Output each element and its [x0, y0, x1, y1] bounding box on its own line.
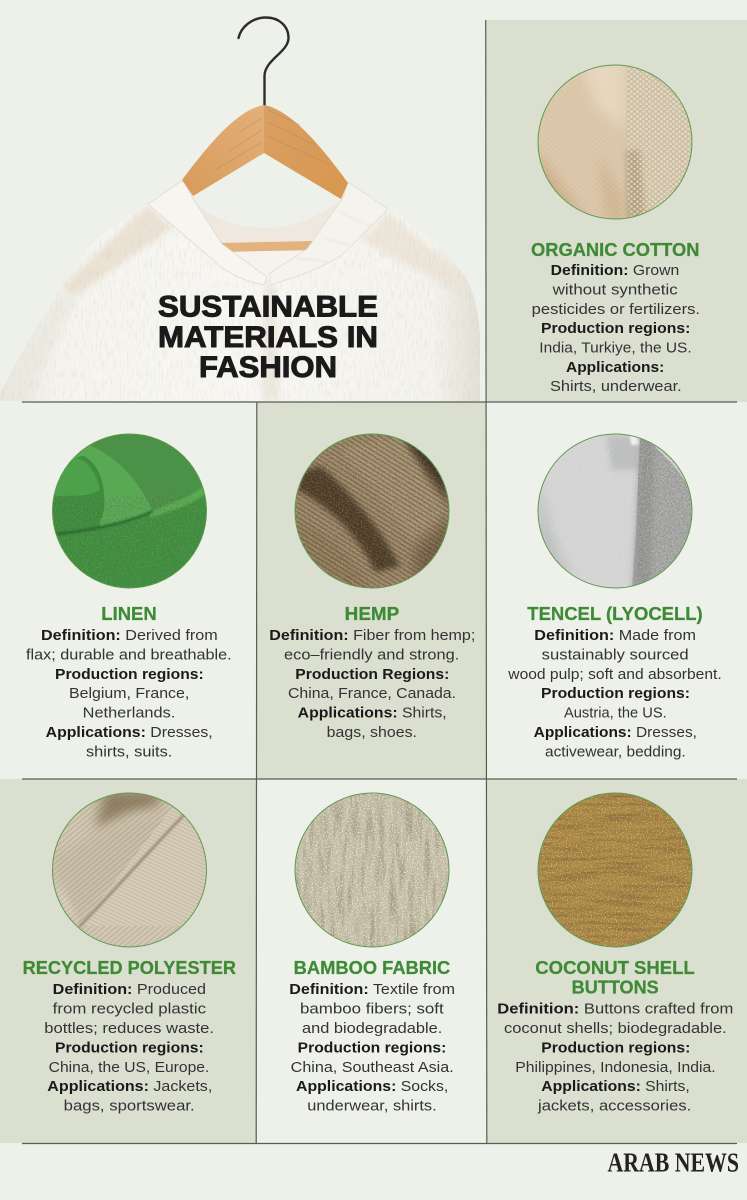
heading: BAMBOO FABRIC — [294, 958, 450, 978]
text block: bags, sportswear. — [64, 1098, 195, 1114]
panel: tencel lyocell — [507, 430, 722, 760]
text block — [497, 1002, 733, 1114]
text block: Definition: Derived from — [41, 628, 218, 644]
text block: Applications: Shirts, — [541, 1079, 690, 1095]
heading: COCONUT SHELL — [535, 958, 695, 978]
text block: Shirts, underwear. — [550, 379, 682, 395]
image: tencel swatch — [538, 434, 692, 588]
text block: Definition: Made from — [534, 628, 696, 644]
hanger crossbar — [220, 241, 312, 252]
swatch ring — [295, 434, 449, 588]
wooden hanger — [182, 105, 348, 199]
text block: eco–friendly and strong. — [284, 648, 459, 664]
image: recycled polyester swatch — [50, 790, 210, 950]
text block: Production regions: — [298, 1040, 446, 1056]
text block: from recycled plastic — [53, 1002, 206, 1018]
panel: coconut shell buttons — [497, 790, 733, 1114]
image: linen swatch — [53, 434, 206, 588]
text block: Applications: Jackets, — [47, 1079, 212, 1095]
text block: wood pulp; soft and absorbent. — [507, 667, 722, 683]
panel: bamboo fabric — [289, 790, 455, 1114]
title: FASHION — [199, 351, 337, 384]
text block: Applications: — [566, 360, 664, 376]
text block: Netherlands. — [83, 706, 175, 722]
text block: Production regions: — [55, 667, 204, 683]
text block: and biodegradable. — [302, 1021, 442, 1037]
text block: Definition: Produced — [53, 982, 206, 998]
text block — [532, 263, 700, 395]
panel: organic cotton background — [486, 20, 747, 402]
image: coconut shell swatch — [538, 794, 692, 946]
text block: Production regions: — [55, 1040, 204, 1056]
text block: bags, shoes. — [327, 725, 417, 741]
text block: Philippines, Indonesia, India. — [515, 1060, 716, 1076]
shirt body — [0, 201, 480, 401]
text block: China, Southeast Asia. — [291, 1060, 454, 1076]
panel: recycled polyester background — [0, 779, 257, 1143]
text block: Applications: Dresses, — [46, 725, 213, 741]
text block — [507, 628, 722, 760]
title — [158, 290, 378, 384]
text block: Production regions: — [541, 1040, 690, 1056]
text block: Austria, the US. — [564, 706, 667, 722]
icon: hanger hook — [238, 18, 288, 106]
image: organic cotton swatch — [538, 66, 692, 218]
right collar band — [270, 182, 388, 285]
text block: activewear, bedding. — [545, 744, 686, 760]
panel: coconut shell buttons background — [487, 779, 747, 1143]
heading: RECYCLED POLYESTER — [23, 958, 236, 978]
text block: sustainably sourced — [542, 648, 689, 664]
text block: shirts, suits. — [86, 744, 172, 760]
text block: Definition: Fiber from hemp; — [269, 628, 475, 644]
swatch ring — [295, 793, 449, 947]
text block: China, the US, Europe. — [49, 1060, 209, 1076]
text block — [44, 982, 214, 1114]
hero image: white shirt on wooden hanger — [0, 18, 480, 402]
text block: Applications: Dresses, — [534, 725, 697, 741]
heading: ORGANIC COTTON — [531, 240, 700, 260]
text block: Definition: Textile from — [289, 982, 455, 998]
heading — [535, 958, 695, 998]
text block: Production regions: — [541, 321, 690, 337]
panel: linen — [26, 428, 232, 760]
text block: Applications: Shirts, — [298, 706, 447, 722]
text block: underwear, shirts. — [307, 1098, 437, 1114]
text block: Production Regions: — [295, 667, 449, 683]
text block: flax; durable and breathable. — [26, 648, 232, 664]
heading: LINEN — [101, 604, 157, 624]
neck opening — [180, 120, 350, 228]
text block: bottles; reduces waste. — [44, 1021, 214, 1037]
panel: hemp background — [257, 402, 486, 779]
text block: pesticides or fertilizers. — [532, 302, 700, 318]
text block: Definition: Grown — [551, 263, 679, 279]
heading: BUTTONS — [572, 978, 659, 998]
swatch ring — [538, 793, 692, 947]
text block: India, Turkiye, the US. — [539, 340, 692, 356]
panel: hemp — [269, 430, 475, 741]
swatch ring — [52, 434, 206, 588]
title: MATERIALS IN — [158, 321, 378, 354]
panel: organic cotton — [530, 60, 700, 395]
image: hemp swatch — [296, 434, 448, 588]
text block: Production regions: — [541, 686, 690, 702]
shirt inner back — [196, 200, 340, 282]
text block: without synthetic — [552, 282, 678, 298]
heading: TENCEL (LYOCELL) — [527, 604, 703, 624]
swatch ring — [538, 434, 692, 588]
text block: Belgium, France, — [69, 686, 189, 702]
panel: recycled polyester — [23, 790, 236, 1114]
text block: Applications: Socks, — [296, 1079, 448, 1095]
text block: coconut shells; biodegradable. — [504, 1021, 727, 1037]
heading: HEMP — [345, 604, 399, 624]
text block: Definition: Buttons crafted from — [497, 1002, 733, 1018]
text block — [26, 628, 232, 760]
text block: China, France, Canada. — [288, 686, 456, 702]
text block: bamboo fibers; soft — [300, 1002, 444, 1018]
left collar band — [148, 180, 267, 285]
text block — [289, 982, 455, 1114]
image: bamboo fabric swatch — [296, 794, 448, 946]
text block: jackets, accessories. — [537, 1098, 691, 1114]
swatch ring — [538, 65, 692, 219]
swatch ring — [52, 793, 206, 947]
text block — [269, 628, 475, 741]
title: SUSTAINABLE — [158, 290, 378, 324]
